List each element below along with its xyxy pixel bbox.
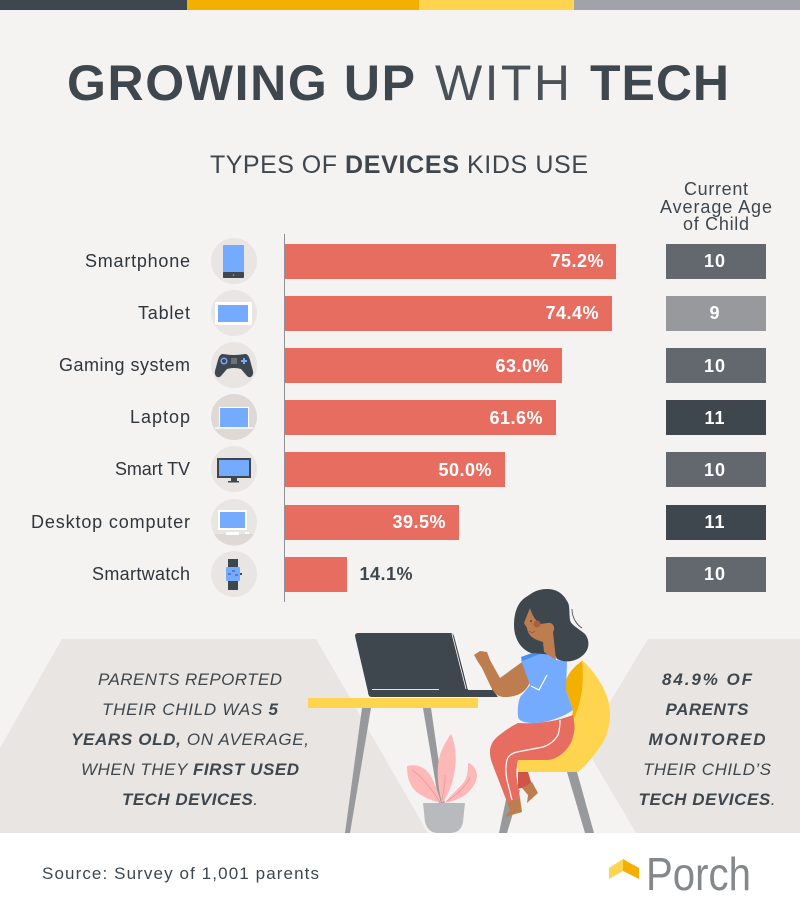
age column: 10 bbox=[704, 564, 726, 584]
hair bbox=[514, 589, 588, 661]
row labels: Gaming system bbox=[59, 355, 190, 375]
bar values: 74.4% bbox=[545, 303, 599, 323]
row labels: Smartwatch bbox=[92, 564, 190, 584]
foot: far bbox=[522, 782, 538, 803]
trousers bbox=[490, 715, 574, 802]
icon: gaming controller bbox=[211, 342, 257, 388]
logo: Porch: Porch bbox=[646, 848, 751, 900]
age column heading bbox=[660, 179, 772, 234]
laptop bbox=[355, 633, 498, 697]
age column heading: Average Age bbox=[660, 197, 772, 217]
eye bbox=[530, 620, 532, 622]
illustration: girl at desk bbox=[308, 589, 610, 833]
left callout text: THEIR CHILD WAS 5 bbox=[102, 700, 279, 719]
right callout text: TECH DEVICES. bbox=[638, 790, 776, 809]
bar values: 75.2% bbox=[550, 251, 604, 271]
age column: 9 bbox=[709, 303, 721, 323]
desk bbox=[308, 698, 478, 833]
row labels: Smart TV bbox=[115, 459, 190, 479]
smile bbox=[529, 631, 535, 632]
row labels: Laptop bbox=[130, 407, 190, 427]
bar chart: device usage bbox=[31, 234, 616, 602]
chart heading: TYPES OF bbox=[210, 151, 337, 179]
row labels: Smartphone bbox=[85, 251, 190, 271]
title: WITH bbox=[435, 55, 570, 111]
bar values: 61.6% bbox=[489, 408, 543, 428]
age column: 11 bbox=[704, 408, 726, 428]
bar values: 63.0% bbox=[495, 356, 549, 376]
plant bbox=[407, 734, 477, 833]
icon: laptop bbox=[211, 394, 257, 440]
left callout text: TECH DEVICES. bbox=[122, 790, 258, 809]
source note: Source: Survey of 1,001 parents bbox=[42, 864, 319, 883]
cheek bbox=[534, 620, 540, 628]
icon: smartphone bbox=[211, 238, 257, 284]
right callout text: PARENTS bbox=[666, 700, 749, 719]
face bbox=[524, 608, 556, 660]
age column: 10 bbox=[704, 356, 726, 376]
age column heading: of Child bbox=[683, 214, 749, 234]
left callout text bbox=[71, 670, 309, 809]
age column: 10 bbox=[704, 460, 726, 480]
title: GROWING UP bbox=[67, 55, 415, 111]
right callout text: 84.9% OF bbox=[662, 670, 753, 689]
row labels: Tablet bbox=[138, 303, 190, 323]
title bbox=[67, 55, 729, 111]
bar values bbox=[359, 251, 604, 584]
foot: near bbox=[505, 798, 522, 817]
shirt bbox=[518, 651, 573, 723]
title: TECH bbox=[590, 55, 729, 111]
panel: right callout background bbox=[584, 639, 800, 833]
age column: 10 bbox=[704, 251, 726, 271]
left callout text: WHEN THEY FIRST USED bbox=[81, 760, 299, 779]
footer bbox=[0, 833, 800, 911]
logo: Porch bbox=[609, 848, 751, 900]
panel: left callout background bbox=[0, 639, 428, 833]
top colour stripe bbox=[0, 0, 800, 10]
chart heading: DEVICES bbox=[345, 151, 459, 179]
age column bbox=[666, 244, 766, 592]
chair bbox=[499, 660, 610, 833]
bar values: 14.1% bbox=[359, 564, 413, 584]
bar values: 39.5% bbox=[392, 512, 446, 532]
bar values: 50.0% bbox=[438, 460, 492, 480]
chart heading: KIDS USE bbox=[467, 151, 588, 179]
icon: tablet bbox=[211, 290, 257, 336]
icon: desktop computer bbox=[211, 499, 257, 546]
left callout text: PARENTS REPORTED bbox=[98, 670, 282, 689]
chart heading bbox=[210, 151, 588, 179]
hair strand bbox=[572, 609, 582, 628]
age column: 11 bbox=[704, 512, 726, 532]
far leg bbox=[518, 772, 532, 789]
row labels: Desktop computer bbox=[31, 512, 190, 532]
shirt crease bbox=[531, 675, 547, 690]
right callout text bbox=[638, 670, 776, 809]
icon: smart TV bbox=[211, 446, 257, 492]
left callout text: YEARS OLD, ON AVERAGE, bbox=[71, 730, 309, 749]
axis line bbox=[284, 234, 285, 602]
bars bbox=[285, 244, 616, 592]
right callout text: THEIR CHILD’S bbox=[643, 760, 772, 779]
age column heading: Current bbox=[684, 179, 748, 199]
icon: smartwatch bbox=[211, 551, 257, 597]
right callout text: MONITORED bbox=[648, 730, 766, 749]
row labels bbox=[31, 251, 190, 584]
arm bbox=[474, 651, 530, 697]
sleeve trim bbox=[521, 649, 545, 661]
